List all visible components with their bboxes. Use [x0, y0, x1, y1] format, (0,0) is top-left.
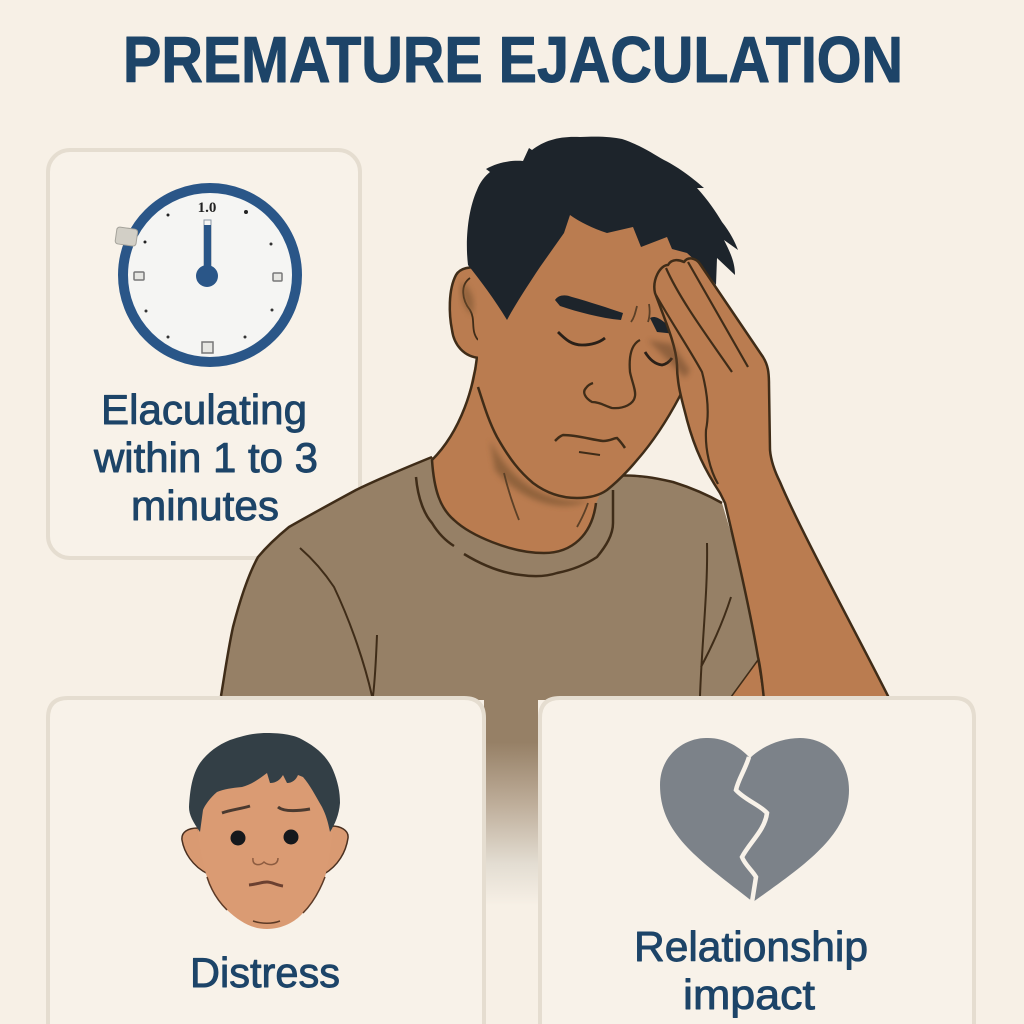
title: PREMATURE EJACULATION: [123, 23, 903, 96]
label: relationship: [634, 923, 868, 1018]
small head hair: [189, 733, 340, 832]
eye shadow: [648, 340, 690, 378]
face: [478, 190, 700, 498]
symptom text: time: minutes: [131, 482, 279, 529]
panel: distress: [48, 698, 484, 1024]
mouth: [555, 435, 625, 448]
collar: [416, 477, 613, 576]
neck creases: [504, 473, 588, 527]
eyes: [558, 332, 605, 345]
chin shadow: [490, 440, 590, 506]
fade under shirt: [484, 696, 538, 906]
hair: [467, 137, 738, 320]
finger lines: [656, 262, 748, 484]
panel: time symptom: [48, 150, 360, 558]
label: distress: Distress: [190, 949, 340, 996]
symptom text: time: within 1 to 3: [93, 434, 318, 481]
panel: relationship: [540, 698, 974, 1024]
neck: [432, 355, 612, 553]
icon: clock: [115, 188, 297, 362]
shirt: [221, 457, 763, 700]
brows: [555, 295, 623, 320]
forearm gap: [731, 660, 764, 697]
frown lines: [631, 304, 650, 322]
sleeve seams: [300, 543, 731, 696]
label: relationship: impact: [683, 971, 815, 1018]
label: relationship: Relationship: [634, 923, 868, 970]
icon: broken heart: [660, 738, 849, 902]
ear: [450, 267, 482, 358]
arm and hand: [654, 258, 890, 700]
icon: distressed face: [182, 733, 348, 929]
symptom text: time: Elaculating: [101, 386, 307, 433]
nose: [584, 340, 640, 408]
illustration: distressed man: [221, 137, 890, 700]
icon: clock: 1.0: [198, 200, 216, 216]
symptom text: time: [93, 386, 318, 529]
